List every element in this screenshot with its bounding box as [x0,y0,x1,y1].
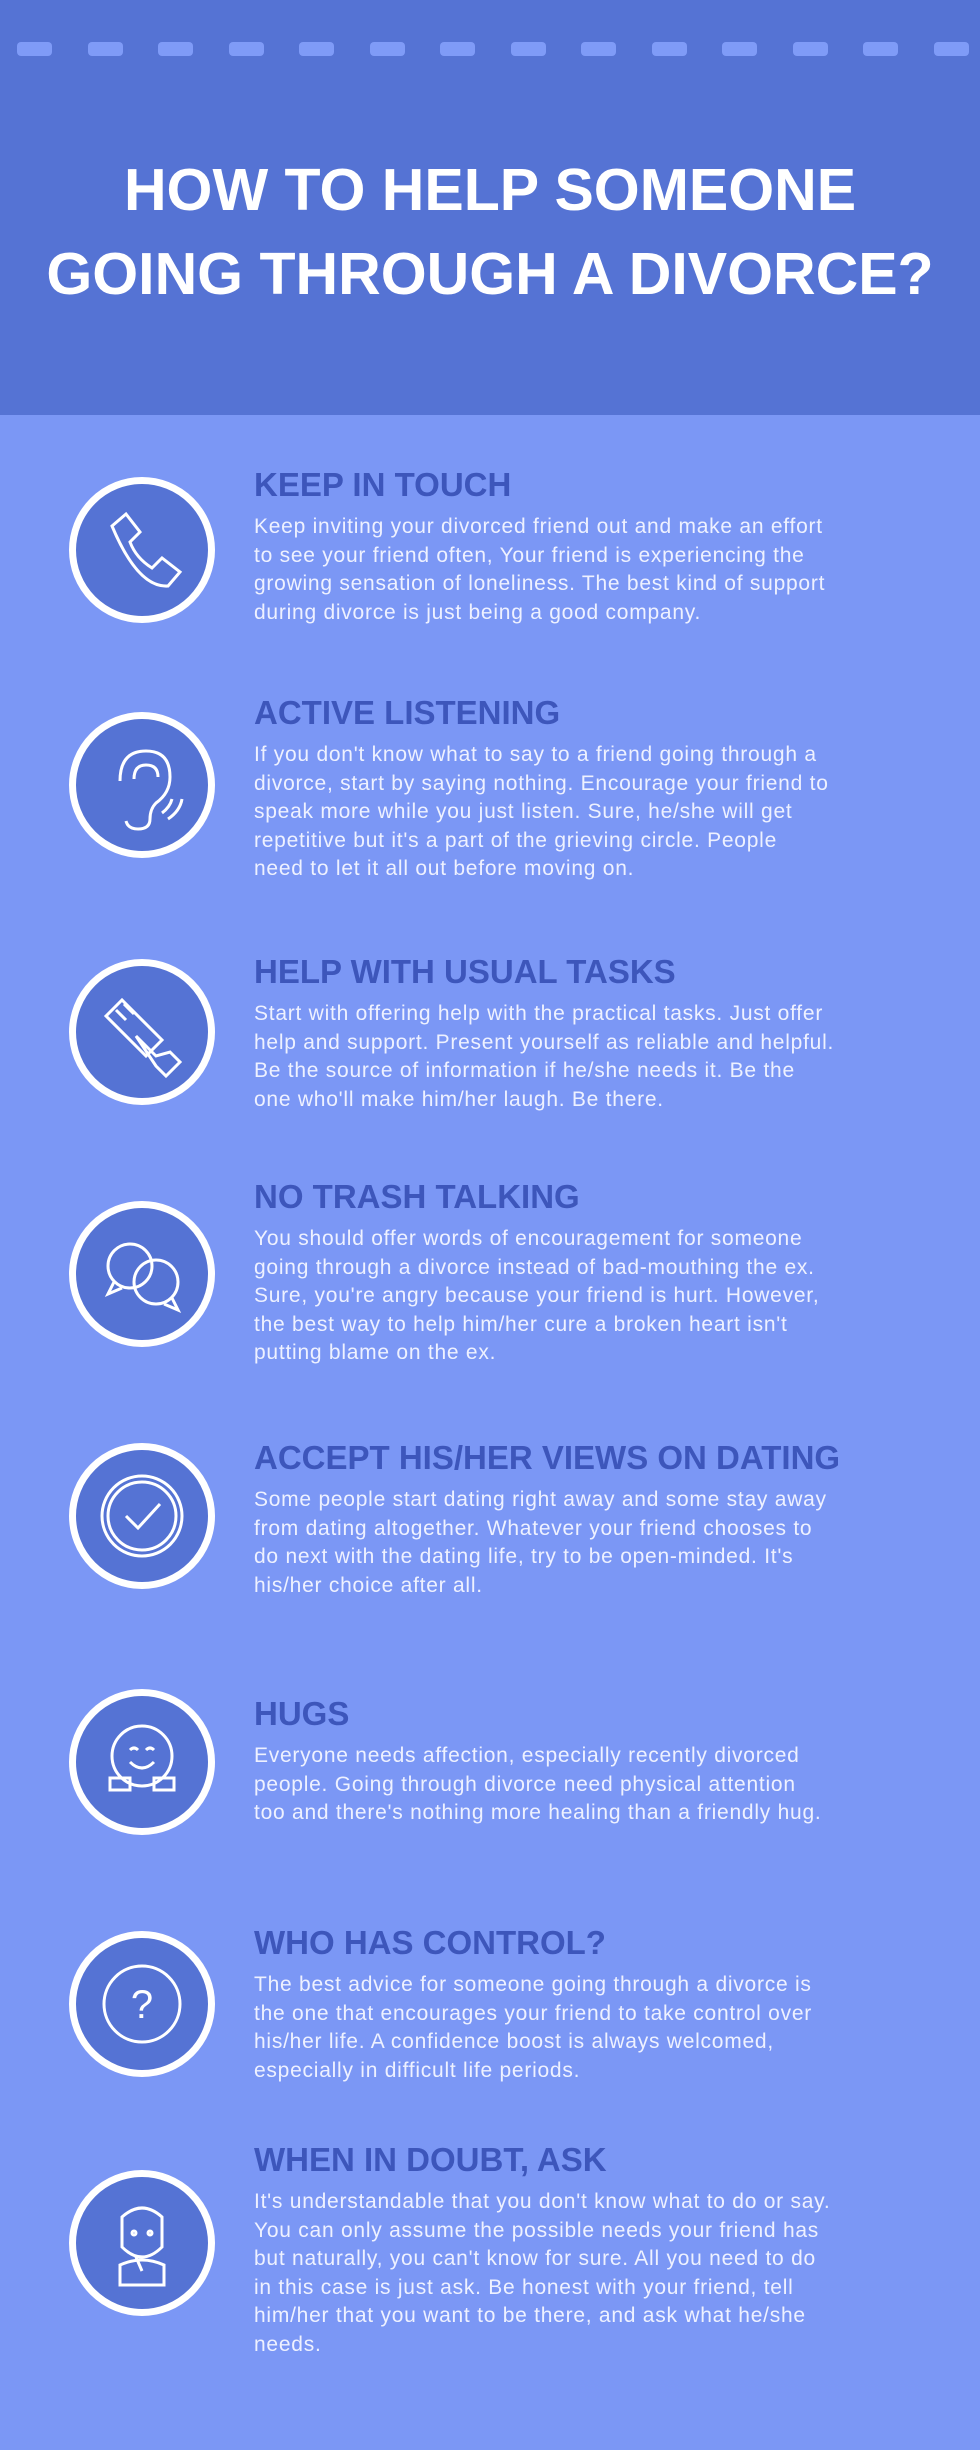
text: his/her choice after all. [254,1574,483,1596]
icon: handshake [69,959,215,1105]
text [254,1227,819,1364]
heading: HELP WITH USUAL TASKS [254,953,676,990]
text: Everyone needs affection, especially recently divorced [254,1744,800,1767]
icon: ear [69,712,215,858]
text [254,1973,812,2082]
section: accept views on dating [69,1439,840,1596]
section: when in doubt ask [69,2141,830,2356]
text: Sure, you're angry because your friend is hurt. However, [254,1284,819,1307]
heading: NO TRASH TALKING [254,1178,580,1215]
heading: WHEN IN DOUBT, ASK [254,2141,607,2178]
text [254,2190,830,2356]
section: no trash talking [69,1178,819,1364]
section: active listening [69,694,829,880]
text [254,743,829,880]
text: divorce, start by saying nothing. Encourage your friend to [254,772,829,794]
section: hugs [69,1689,821,1835]
text: to see your friend often, Your friend is experiencing the [254,544,805,566]
text: repetitive but it's a part of the grieving circle. People [254,828,777,852]
icon: speech bubbles [69,1201,215,1347]
icon: phone [69,477,215,623]
heading: WHO HAS CONTROL? [254,1924,606,1961]
text: needs. [254,2332,322,2356]
text: It's understandable that you don't know what to do or say. [254,2190,830,2213]
icon: check [69,1443,215,1589]
heading: ACCEPT HIS/HER VIEWS ON DATING [254,1439,840,1476]
text: Keep inviting your divorced friend out and make an effort [254,515,823,538]
icon: question [69,1931,215,2077]
text: in this case is just ask. Be honest with your friend, tell [254,2276,794,2298]
text: growing sensation of loneliness. The best kind of support [254,572,825,595]
text: but naturally, you can't know for sure. All you need to do [254,2247,816,2270]
title: GOING THROUGH A DIVORCE? [46,241,934,307]
text: during divorce is just being a good company. [254,600,701,624]
section: help with usual tasks [69,953,834,1110]
text [254,515,825,624]
icon: thinking person [69,2170,215,2316]
icon: smiley hug [69,1689,215,1835]
title: HOW TO HELP SOMEONE [124,157,856,223]
text: him/her that you want to be there, and ask what he/she [254,2304,806,2327]
text: people. Going through divorce need physical attention [254,1772,796,1796]
text: especially in difficult life periods. [254,2058,580,2082]
text: help and support. Present yourself as reliable and helpful. [254,1030,834,1054]
text: Be the source of information if he/she needs it. Be the [254,1059,795,1082]
text: going through a divorce instead of bad-mouthing the ex. [254,1256,815,1278]
text [254,1488,827,1596]
text: You can only assume the possible needs your friend has [254,2218,819,2242]
text: too and there's nothing more healing than a friendly hug. [254,1801,821,1824]
text: from dating altogether. Whatever your friend chooses to [254,1516,812,1540]
text: one who'll make him/her laugh. Be there. [254,1088,664,1110]
text: Start with offering help with the practical tasks. Just offer [254,1002,823,1025]
text: speak more while you just listen. Sure, he/she will get [254,800,792,823]
text: the one that encourages your friend to take control over [254,2002,812,2024]
text: You should offer words of encouragement for someone [254,1227,802,1250]
text: the best way to help him/her cure a broken heart isn't [254,1312,788,1336]
heading: KEEP IN TOUCH [254,466,511,503]
text [254,1744,821,1824]
text: do next with the dating life, try to be open-minded. It's [254,1545,793,1568]
text [254,1002,834,1110]
header band [0,0,980,415]
text: putting blame on the ex. [254,1341,496,1364]
text: need to let it all out before moving on. [254,857,634,880]
heading: HUGS [254,1695,349,1732]
text: If you don't know what to say to a friend going through a [254,743,817,766]
text: his/her life. A confidence boost is always welcomed, [254,2030,774,2053]
icon: question: ? [131,1983,153,2027]
section: keep in touch [69,466,825,624]
text: The best advice for someone going through a divorce is [254,1973,812,1996]
section: who has control [69,1924,812,2082]
heading: ACTIVE LISTENING [254,694,560,731]
title [46,157,934,307]
text: Some people start dating right away and some stay away [254,1488,827,1511]
